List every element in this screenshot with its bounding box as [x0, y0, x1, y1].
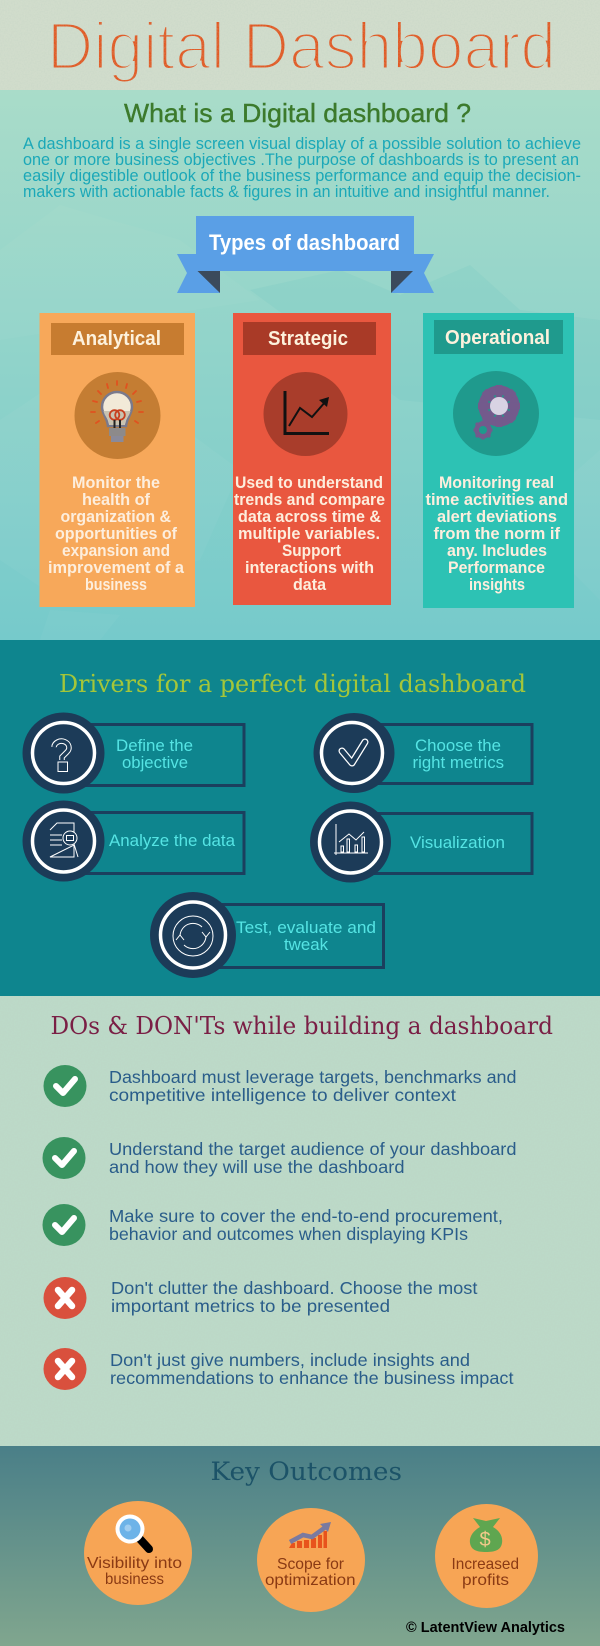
outcome: visibility: business [105, 1571, 164, 1588]
ribbon: types of dashboard: Types of dashboard [209, 230, 400, 255]
outcome: increased profits: profits [462, 1572, 509, 1589]
text: operational description: alert deviations [437, 507, 557, 526]
text: strategic description [234, 473, 385, 594]
card: analytical: Analytical [72, 328, 161, 350]
text: analytical description: Monitor the [72, 473, 160, 492]
text: analytical description: organization & [60, 507, 171, 526]
dont item 2: recommendations to enhance the business impact [110, 1368, 514, 1388]
icon: magnifier [116, 1514, 149, 1549]
icon: document with magnifier [50, 823, 78, 857]
heading: dos and donts: DOs & DON'Ts while building a dashboard [50, 1012, 553, 1040]
do item 1 [44, 1065, 516, 1107]
do item 1: competitive intelligence to deliver context [109, 1085, 456, 1105]
icon: gears [474, 385, 520, 440]
text: operational description: time activities and [426, 490, 568, 509]
icon: question mark [54, 741, 69, 772]
driver: define the objective: Define the [116, 736, 193, 755]
do item 1: Dashboard must leverage targets, benchmarks and [109, 1067, 516, 1087]
icon: growth chart [289, 1522, 331, 1548]
heading: key outcomes: Key Outcomes [210, 1457, 402, 1486]
dont item 2: Don't just give numbers, include insights and [110, 1350, 470, 1370]
card: operational [423, 313, 574, 608]
driver: choose the right metrics: right metrics [412, 753, 504, 772]
driver: define the objective: objective [122, 753, 188, 772]
text: operational description [426, 473, 568, 594]
text: strategic description: interactions with [245, 558, 374, 577]
driver: test evaluate and tweak: tweak [284, 935, 328, 954]
do item 2: and how they will use the dashboard [109, 1157, 404, 1177]
text: analytical description: opportunities of [55, 524, 177, 543]
icon: refresh cycle [173, 916, 213, 956]
panel: drivers [0, 640, 600, 996]
outcome: visibility [84, 1501, 192, 1605]
card: strategic [233, 313, 391, 605]
icon: line chart [285, 391, 329, 434]
driver: choose the right metrics [314, 713, 532, 793]
text block: definition [23, 135, 581, 201]
text: strategic description: multiple variables. [238, 524, 380, 543]
driver: visualization: Visualization [410, 833, 505, 852]
copyright: © LatentView Analytics [406, 1620, 565, 1636]
text: analytical description [48, 473, 185, 594]
panel: dos and donts [0, 996, 600, 1446]
dont item 1: important metrics to be presented [111, 1296, 390, 1316]
card: strategic: Strategic [268, 328, 348, 350]
do item 2 [42, 1137, 516, 1179]
driver: test evaluate and tweak [150, 892, 384, 978]
outcome: scope for optimization: optimization [265, 1572, 356, 1589]
outcome: scope for optimization [257, 1508, 365, 1612]
outcome: visibility: Visibility into [87, 1555, 182, 1572]
driver: define the objective [22, 712, 244, 794]
text block: definition: one or more business objectives .The purpose of dashboards is to present an [23, 151, 579, 169]
icon: light bulb [91, 381, 143, 442]
text: operational description: Monitoring real [439, 473, 554, 492]
text: operational description: Performance [448, 558, 545, 577]
text: strategic description: data across time & [238, 507, 381, 526]
heading: what is: What is a Digital dashboard ? [124, 98, 471, 128]
do item 3: Make sure to cover the end-to-end procurement, [109, 1206, 503, 1226]
do item 2: Understand the target audience of your dashboard [109, 1139, 516, 1159]
title: Digital Dashboard [47, 9, 556, 84]
text: operational description: any. Includes [447, 541, 547, 560]
outcome: increased profits [435, 1504, 538, 1608]
do item 3 [42, 1204, 503, 1246]
driver: analyze the data [22, 800, 244, 882]
dont item 1: Don't clutter the dashboard. Choose the most [111, 1278, 478, 1298]
heading: drivers: Drivers for a perfect digital dashboard [59, 670, 526, 698]
dont item 2 [44, 1348, 514, 1390]
card: operational: Operational [445, 327, 550, 349]
driver: analyze the data: Analyze the data [109, 831, 236, 850]
text block: definition: makers with actionable facts & figures in an intuitive and insightful manner. [23, 183, 550, 201]
text: analytical description: health of [82, 490, 150, 509]
text: analytical description: improvement of a [48, 558, 185, 577]
ribbon: types of dashboard [177, 216, 434, 293]
icon: check outline [342, 742, 365, 763]
driver: choose the right metrics: Choose the [415, 736, 501, 755]
text: analytical description: expansion and [62, 541, 170, 560]
text: strategic description: Used to understand [235, 473, 383, 492]
text: strategic description: data [293, 575, 327, 594]
panel: key outcomes [0, 1446, 600, 1646]
do item 3: behavior and outcomes when displaying KPIs [109, 1224, 468, 1244]
text: strategic description: Support [282, 541, 341, 560]
dont item 1 [44, 1277, 478, 1319]
card: analytical [40, 313, 195, 607]
panel: title band [0, 0, 600, 90]
text: operational description: insights [469, 575, 525, 594]
outcome: increased profits: Increased [452, 1556, 519, 1573]
text block: definition: easily digestible outlook of the business performance and equip the decision- [23, 167, 581, 185]
icon: money bag: $ [480, 1529, 491, 1551]
driver: visualization [310, 802, 532, 882]
outcome: scope for optimization: Scope for [277, 1556, 345, 1573]
text: analytical description: business [85, 575, 147, 594]
panel: what is a digital dashboard [0, 90, 600, 640]
driver: test evaluate and tweak: Test, evaluate and [236, 918, 376, 937]
text block: definition: A dashboard is a single screen visual display of a possible solution to achieve [23, 135, 581, 153]
text: operational description: from the norm if [434, 524, 560, 543]
text: strategic description: trends and compare [234, 490, 385, 509]
icon: bar and line chart [334, 824, 368, 855]
